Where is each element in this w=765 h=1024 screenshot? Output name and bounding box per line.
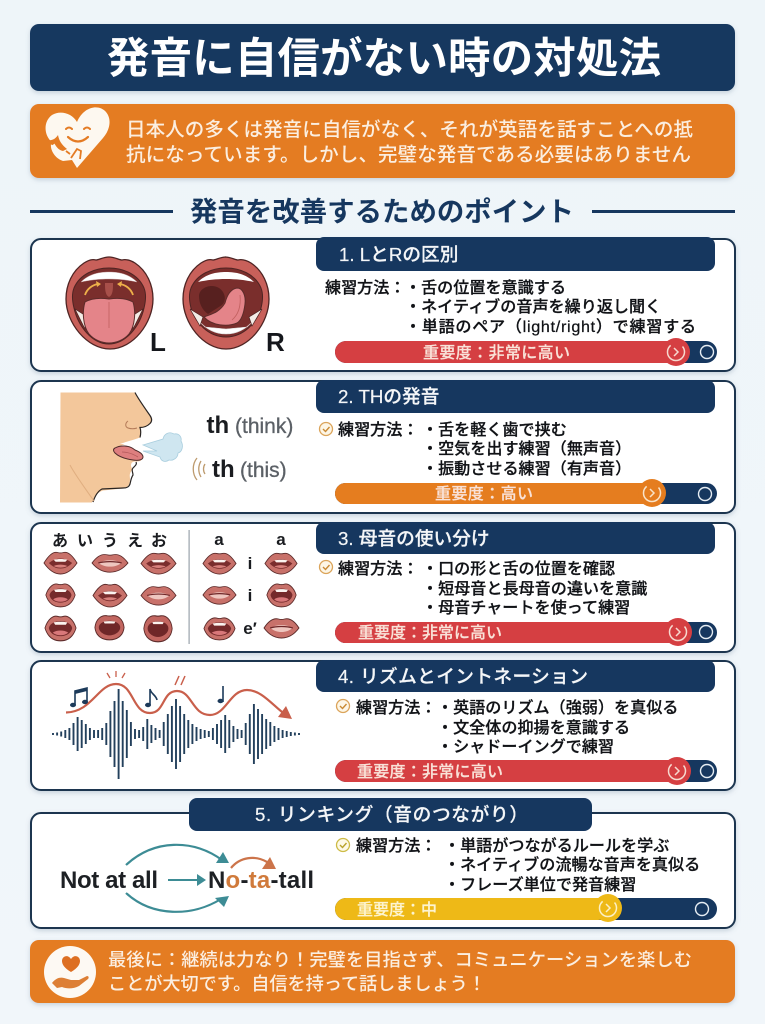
practice list 5: ・単語がつながるルールを学ぶ — [444, 836, 669, 855]
practice list 5: ・ネイティブの流暢な音声を真似る — [444, 855, 700, 874]
label: th think — [206, 412, 293, 439]
panel 2: TH — [31, 380, 735, 513]
practice list 1: 練習方法： — [325, 279, 405, 297]
importance bar 2: 重要度：高い — [435, 485, 533, 503]
linking diagram — [60, 845, 314, 912]
heading: panel 2 tab — [316, 380, 715, 413]
heading: panel 5 tab — [189, 798, 592, 831]
panel 1: L and R — [31, 237, 735, 371]
practice list 2: ・振動させる練習（有声音） — [422, 460, 631, 478]
label: th this: th — [212, 456, 235, 483]
mouth grid: English vowels — [203, 553, 299, 640]
importance bar 1 — [335, 338, 717, 366]
importance bar 4 — [335, 757, 717, 785]
intro text: 抗になっています。しかし、完璧な発音である必要はありません — [126, 144, 691, 166]
melody curve arrow — [66, 671, 292, 719]
intro text: 日本人の多くは発音に自信がなく、それが英語を話すことへの抵 — [126, 119, 693, 141]
practice list 4: ・シャドーイングで練習 — [437, 738, 614, 756]
practice list 5 — [336, 836, 700, 894]
icon: heart hugging smile — [46, 107, 110, 168]
panel 4: rhythm — [31, 660, 735, 790]
chart: speech waveform — [53, 689, 299, 779]
practice list 1: ・舌の位置を意識する — [405, 279, 566, 297]
title banner: 発音に自信がない時の対処法 — [107, 35, 661, 82]
closing text: 最後に：継続は力なり！完璧を目指さず、コミュニケーションを楽しむ — [108, 950, 692, 970]
label: th think: (think) — [235, 415, 293, 438]
practice list 1: ・ネイティブの音声を繰り返し聞く — [405, 297, 661, 316]
section heading: 発音を改善するためのポイント — [190, 196, 574, 227]
practice list 4: 練習方法： — [356, 699, 436, 717]
practice list 2: ・舌を軽く歯で挟む — [422, 421, 567, 439]
illustration: R mouth — [183, 257, 285, 357]
vowel labels: a — [276, 530, 286, 549]
intro callout — [30, 104, 735, 178]
heading: panel 2 tab: 2. THの発音 — [338, 386, 439, 407]
linking diagram: No-ta-tall — [208, 867, 314, 894]
practice list 4: ・文全体の抑揚を意識する — [437, 719, 630, 737]
panel 5: linking — [31, 798, 735, 928]
illustration: L mouth: L — [150, 327, 166, 357]
closing text — [108, 950, 692, 994]
practice list 3: ・口の形と舌の位置を確認 — [422, 560, 615, 578]
heading: panel 1 tab — [316, 237, 715, 271]
vowel labels — [52, 530, 286, 638]
icons: music notes — [70, 686, 224, 707]
heading: panel 4 tab: 4. リズムとイントネーション — [338, 666, 588, 687]
illustration: R mouth: R — [266, 327, 285, 357]
label: th this — [193, 456, 287, 483]
practice list 5: 練習方法： — [356, 837, 436, 855]
closing text: ことが大切です。自信を持って話しましょう！ — [108, 973, 486, 994]
illustration: L mouth — [66, 257, 166, 357]
importance bar 3 — [335, 618, 717, 646]
vowel labels: あ — [52, 532, 68, 550]
importance bar 1: 重要度：非常に高い — [423, 344, 570, 362]
practice list 3: 練習方法： — [338, 560, 418, 578]
vowel labels: i — [248, 586, 252, 605]
practice list 2: 練習方法： — [338, 421, 418, 439]
vowel labels: a — [214, 530, 224, 549]
practice list 2 — [320, 421, 631, 478]
practice list 1: ・単語のペア（light/right）で練習する — [405, 318, 696, 336]
section heading — [30, 196, 735, 227]
importance bar 4: 重要度：非常に高い — [357, 763, 503, 781]
heading: panel 5 tab: 5. リンキング（音のつながり） — [255, 804, 528, 825]
closing callout — [30, 940, 735, 1003]
practice list 3: ・母音チャートを使って練習 — [422, 599, 630, 617]
practice list 1 — [325, 279, 696, 336]
vowel labels: e′ — [243, 619, 257, 638]
label: th think: th — [206, 412, 229, 439]
panel 3: vowels — [31, 522, 735, 652]
icon: air puff — [143, 433, 182, 461]
linking diagram: Not at all — [60, 867, 158, 894]
importance bar 5 — [335, 894, 717, 922]
heading: panel 4 tab — [316, 660, 715, 692]
illustration: face with tongue between teeth — [60, 392, 152, 502]
practice list 2: ・空気を出す練習（無声音） — [422, 440, 631, 458]
practice list 4: ・英語のリズム（強弱）を真似る — [437, 698, 678, 717]
mouth grid: Japanese vowels — [44, 552, 176, 642]
title banner — [30, 24, 735, 91]
practice list 5: ・フレーズ単位で発音練習 — [444, 875, 636, 894]
vowel labels: い — [77, 533, 93, 550]
practice list 4 — [336, 698, 678, 756]
importance bar 2 — [335, 479, 717, 507]
vowel labels: お — [151, 532, 167, 550]
heading: panel 1 tab: 1. LとRの区別 — [339, 244, 458, 265]
practice list 3 — [320, 560, 647, 617]
heading: panel 3 tab: 3. 母音の使い分け — [338, 528, 490, 549]
practice list 3: ・短母音と長母音の違いを意識 — [422, 580, 647, 598]
icon: heart in hand — [44, 946, 96, 998]
vowel labels: え — [127, 532, 143, 550]
importance bar 5: 重要度：中 — [357, 901, 437, 919]
heading: panel 3 tab — [316, 522, 715, 554]
vowel labels: i — [248, 554, 252, 573]
vowel labels: う — [102, 533, 118, 550]
label: th this: (this) — [240, 459, 287, 482]
importance bar 3: 重要度：非常に高い — [358, 624, 502, 642]
intro text — [126, 119, 693, 166]
